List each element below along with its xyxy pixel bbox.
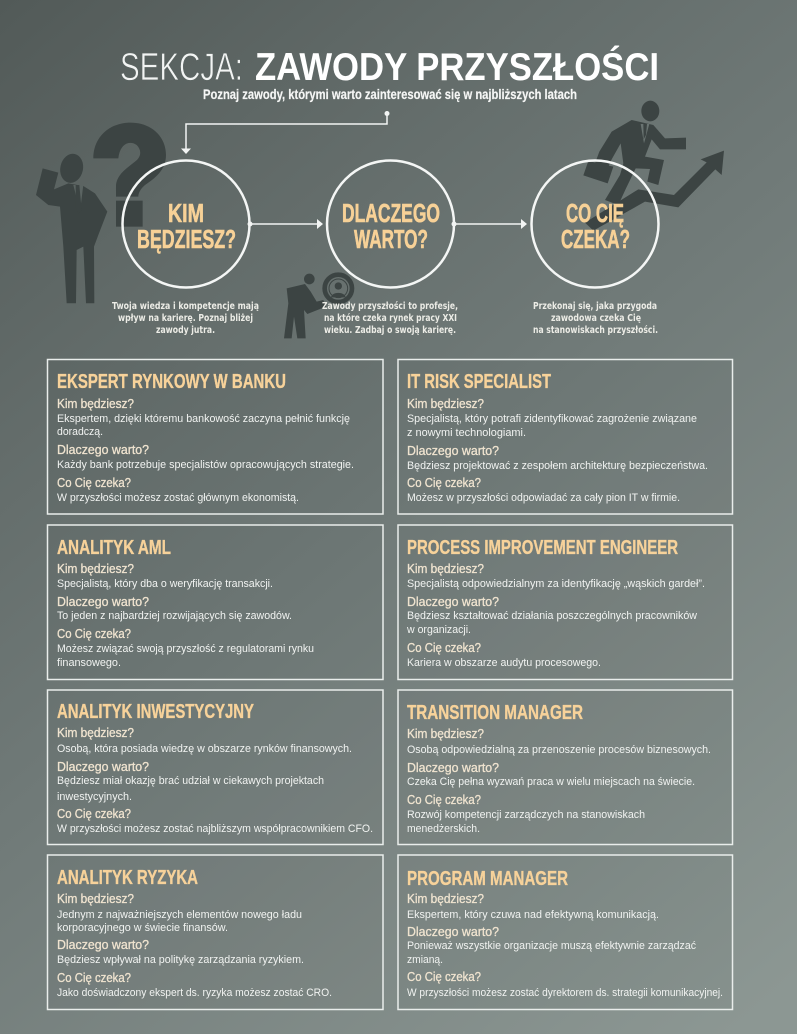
panel: ekspert rynkowy w banku: Kim będziesz? <box>57 396 134 411</box>
panel: transition manager: TRANSITION MANAGER <box>407 702 583 724</box>
panel: analityk inwestycyjny: Kim będziesz? <box>57 725 134 740</box>
icon: running man with rising arrow <box>583 101 724 231</box>
panel: analityk aml: finansowego. <box>57 657 121 669</box>
panel: analityk ryzyka: korporacyjnego w świecie finansów. <box>57 922 228 934</box>
circle: co cię czeka <box>532 160 658 288</box>
panel: program manager: Co Cię czeka? <box>407 969 481 984</box>
panel: analityk aml: Co Cię czeka? <box>57 626 131 641</box>
circle: kim będziesz <box>122 160 250 288</box>
panel: ekspert rynkowy w banku <box>48 360 383 514</box>
panel: process improvement engineer: Będziesz kształtować działania poszczególnych pracowników <box>407 610 698 622</box>
icon: man with question mark <box>36 123 166 303</box>
caption: co cię czeka <box>533 301 658 336</box>
panel: analityk aml: Specjalistą, który dba o weryfikację transakcji. <box>57 578 273 590</box>
panel: transition manager: Czeka Cię pełna wyzwań praca w wielu miejscach na świecie. <box>407 776 695 788</box>
panel: it risk specialist: Specjalistą, który potrafi zidentyfikować zagrożenie związane <box>407 413 697 425</box>
panel: it risk specialist: IT RISK SPECIALIST <box>407 371 551 393</box>
panel: process improvement engineer: Kim będziesz? <box>407 561 484 576</box>
panel: ekspert rynkowy w banku: Dlaczego warto? <box>57 442 149 457</box>
panel: program manager: Ekspertem, który czuwa nad efektywną komunikacją. <box>407 909 659 921</box>
panel: it risk specialist <box>398 360 732 514</box>
panel: analityk ryzyka: Kim będziesz? <box>57 891 134 906</box>
panel: analityk ryzyka: Co Cię czeka? <box>57 970 131 985</box>
panel: analityk inwestycyjny: Osobą, która posiada wiedzę w obszarze rynków finansowych. <box>57 743 352 755</box>
panel: process improvement engineer: Specjalistą odpowiedzialnym za identyfikację „wąskich gardeł”. <box>407 578 705 590</box>
circle: co cię czeka: CZEKA? <box>561 226 630 254</box>
panel: ekspert rynkowy w banku: W przyszłości możesz zostać głównym ekonomistą. <box>57 492 299 504</box>
panel: transition manager: Dlaczego warto? <box>407 760 499 775</box>
panel: program manager: Dlaczego warto? <box>407 924 499 939</box>
panel: program manager: Kim będziesz? <box>407 891 484 906</box>
caption: kim będziesz: Twoja wiedza i kompetencje mają <box>112 301 259 312</box>
panel: it risk specialist: z nowymi technologiami. <box>407 427 526 439</box>
panel: ekspert rynkowy w banku: Każdy bank potrzebuje specjalistów opracowujących strategie. <box>57 459 354 471</box>
panel: analityk aml: Dlaczego warto? <box>57 594 149 609</box>
panel: transition manager: Osobą odpowiedzialną za przenoszenie procesów biznesowych. <box>407 744 711 756</box>
panel: analityk ryzyka: ANALITYK RYZYKA <box>57 867 198 889</box>
subtitle: Poznaj zawody, którymi warto zainteresować się w najbliższych latach <box>203 86 577 102</box>
panel: process improvement engineer: Kariera w obszarze audytu procesowego. <box>407 657 601 669</box>
panel: process improvement engineer <box>398 525 732 680</box>
panel: transition manager: Co Cię czeka? <box>407 792 481 807</box>
caption: co cię czeka: Przekonaj się, jaka przygoda <box>533 301 657 312</box>
panel: it risk specialist: Dlaczego warto? <box>407 443 499 458</box>
title: SEKCJA: <box>120 46 243 89</box>
panel: program manager: PROGRAM MANAGER <box>407 868 568 890</box>
title: ZAWODY PRZYSZŁOŚCI <box>255 45 659 89</box>
panel: ekspert rynkowy w banku: Co Cię czeka? <box>57 475 131 490</box>
arrow: kim będziesz to dlaczego warto <box>248 219 323 229</box>
panel: analityk ryzyka: Będziesz wpływał na politykę zarządzania ryzykiem. <box>57 954 304 966</box>
caption: co cię czeka: na stanowiskach przyszłości. <box>533 325 658 336</box>
panel: ekspert rynkowy w banku: doradczą. <box>57 426 103 438</box>
panel: transition manager: menedżerskich. <box>407 823 480 835</box>
connector arrow: subtitle to first circle <box>181 111 390 154</box>
caption: kim będziesz: zawody jutra. <box>156 325 215 336</box>
panel: process improvement engineer: Dlaczego warto? <box>407 594 499 609</box>
panel: analityk aml: Kim będziesz? <box>57 561 134 576</box>
panel: it risk specialist: Kim będziesz? <box>407 396 484 411</box>
panel: analityk inwestycyjny: Będziesz miał okazję brać udział w ciekawych projektach <box>57 775 324 787</box>
caption: dlaczego warto: wieku. Zadbaj o swoją karierę. <box>324 325 456 336</box>
caption: dlaczego warto <box>322 301 458 336</box>
panel: analityk inwestycyjny: ANALITYK INWESTYCYJNY <box>57 701 254 723</box>
panel: analityk ryzyka: Jako doświadczony ekspert ds. ryzyka możesz zostać CRO. <box>57 987 332 999</box>
panel: analityk aml <box>48 525 383 680</box>
circle: dlaczego warto <box>327 160 454 288</box>
panel: program manager: zmianą. <box>407 954 443 966</box>
panel: it risk specialist: Możesz w przyszłości odpowiadać za cały pion IT w firmie. <box>407 492 680 504</box>
panel: analityk aml: Możesz związać swoją przyszłość z regulatorami rynku <box>57 643 314 655</box>
panel: process improvement engineer: PROCESS IMPROVEMENT ENGINEER <box>407 537 678 559</box>
title <box>120 45 659 89</box>
circle: kim będziesz: BĘDZIESZ? <box>137 226 236 254</box>
panel: analityk inwestycyjny <box>48 690 383 844</box>
panel: ekspert rynkowy w banku: EKSPERT RYNKOWY W BANKU <box>57 371 286 393</box>
panel: transition manager: Kim będziesz? <box>407 726 484 741</box>
circle: dlaczego warto: DLACZEGO <box>342 200 440 228</box>
panel: program manager: W przyszłości możesz zostać dyrektorem ds. strategii komunikacyjnej. <box>407 987 723 999</box>
caption: kim będziesz: wpływ na karierę. Poznaj bliżej <box>118 313 253 324</box>
circle: dlaczego warto: WARTO? <box>354 226 428 254</box>
panel: analityk ryzyka: Dlaczego warto? <box>57 937 149 952</box>
circle: co cię czeka: CO CIĘ <box>566 200 624 228</box>
panel: analityk ryzyka <box>48 855 383 1010</box>
caption: dlaczego warto: Zawody przyszłości to profesje, <box>322 301 458 312</box>
panel: analityk inwestycyjny: W przyszłości możesz zostać najbliższym współpracownikiem CFO. <box>57 823 373 835</box>
panel: transition manager <box>398 690 732 844</box>
panel: process improvement engineer: Co Cię czeka? <box>407 640 481 655</box>
panel: analityk inwestycyjny: Co Cię czeka? <box>57 806 131 821</box>
panel: analityk inwestycyjny: Dlaczego warto? <box>57 759 149 774</box>
panel: transition manager: Rozwój kompetencji zarządczych na stanowiskach <box>407 809 645 821</box>
panel: ekspert rynkowy w banku: Ekspertem, dzięki któremu bankowość zaczyna pełnić funkcję <box>57 413 350 425</box>
circle: kim będziesz: KIM <box>168 200 204 228</box>
icon: man with magnifier <box>284 274 352 338</box>
panel: it risk specialist: Będziesz projektować z zespołem architekturę bezpieczeństwa. <box>407 460 708 472</box>
panel: analityk aml: ANALITYK AML <box>57 537 171 559</box>
panel: analityk inwestycyjny: inwestycyjnych. <box>57 791 132 803</box>
caption: kim będziesz <box>112 301 259 336</box>
panel: program manager <box>398 855 732 1010</box>
arrow: dlaczego warto to co cię czeka <box>452 219 527 229</box>
panel: it risk specialist: Co Cię czeka? <box>407 475 481 490</box>
panel: process improvement engineer: w organizacji. <box>406 624 471 636</box>
panel: analityk aml: To jeden z najbardziej rozwijających się zawodów. <box>57 610 292 622</box>
panel: analityk ryzyka: Jednym z najważniejszych elementów nowego ładu <box>57 909 302 921</box>
caption: co cię czeka: zawodowa czeka Cię <box>551 313 641 324</box>
caption: dlaczego warto: na które czeka rynek pracy XXI <box>324 313 457 324</box>
panel: program manager: Ponieważ wszystkie organizacje muszą efektywnie zarządzać <box>407 940 696 952</box>
